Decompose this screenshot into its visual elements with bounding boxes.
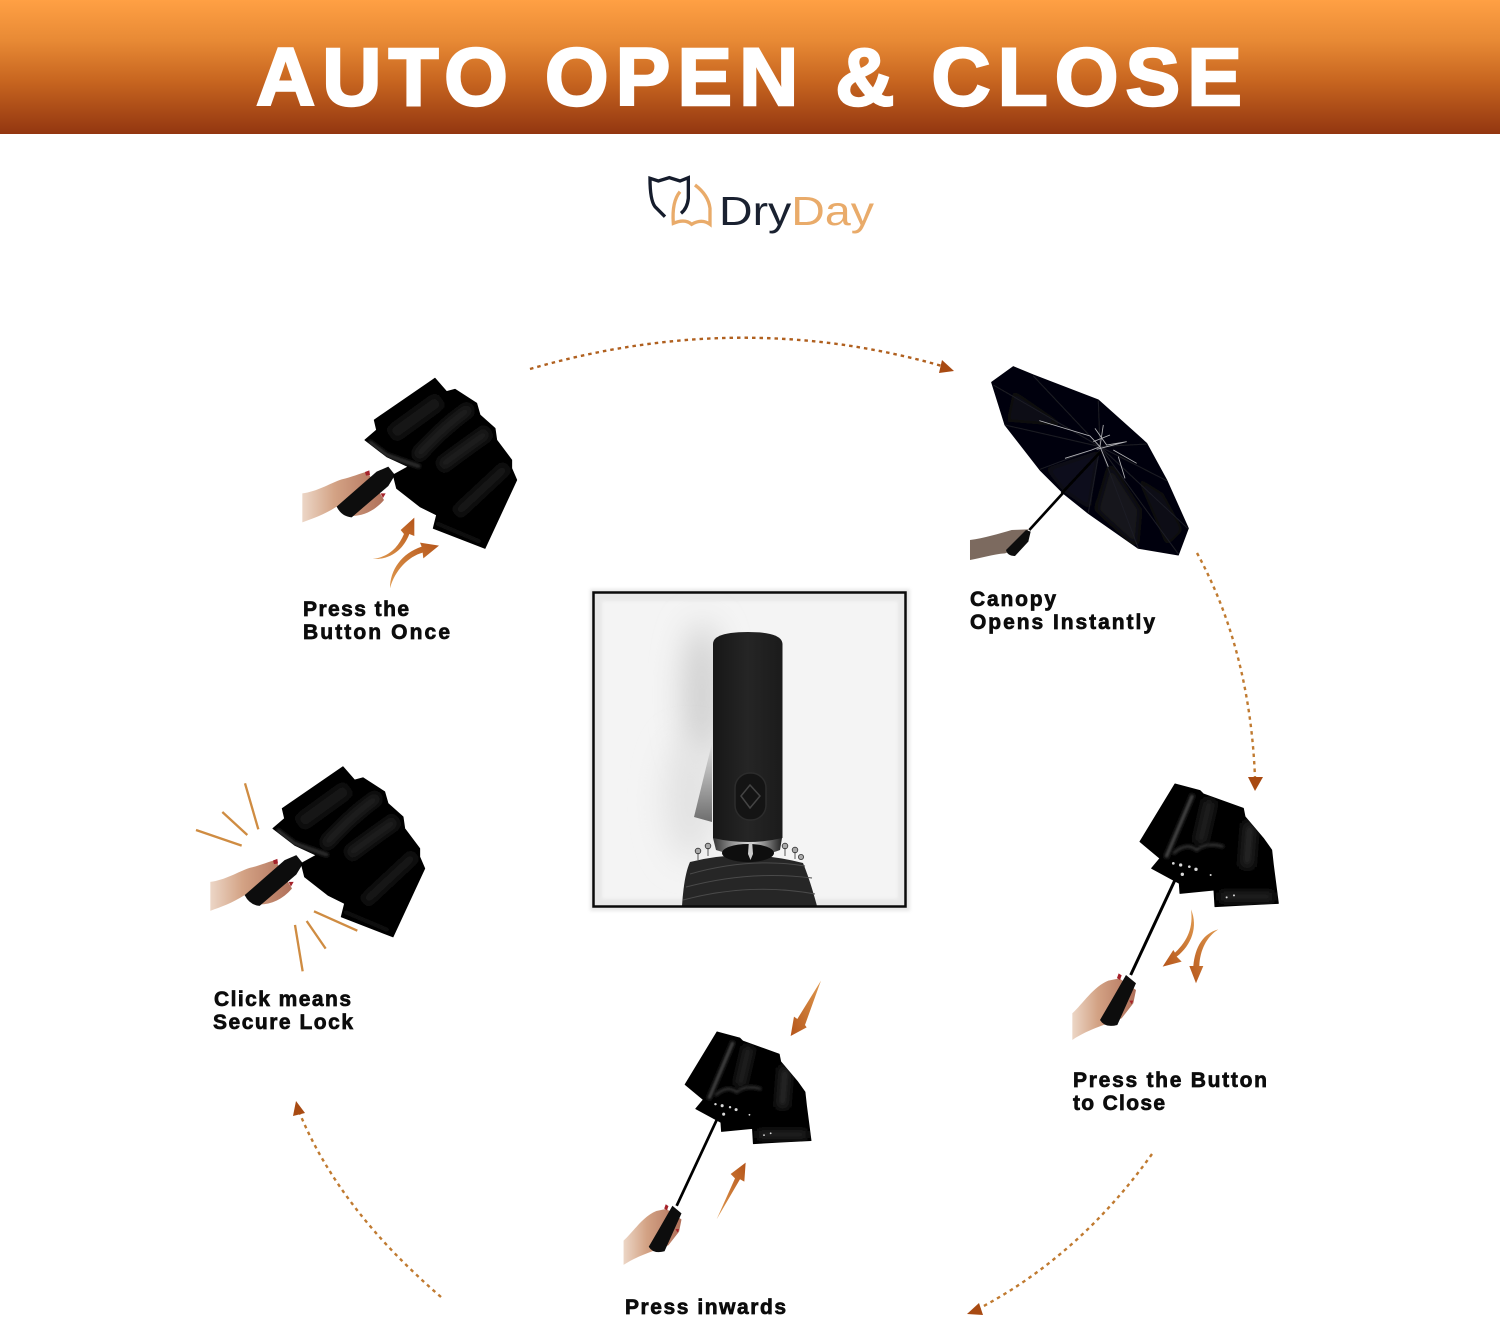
arrow: dotted arc step 1 to 2 xyxy=(530,338,954,373)
label: press inwards: Press inwards xyxy=(625,1296,786,1319)
arrow: dotted arc step 3 to 4 xyxy=(967,1154,1152,1315)
label: press the button to close: to Close xyxy=(1073,1092,1165,1115)
arrow: dotted arc step 2 to 3 xyxy=(1197,553,1263,791)
orange arrows: inwards xyxy=(717,981,821,1219)
title: AUTO OPEN & CLOSE xyxy=(256,32,1242,123)
tip pins xyxy=(695,843,804,860)
icon: shield and book xyxy=(650,178,710,224)
label: click means secure lock xyxy=(213,988,353,1034)
center photo: umbrella handle and button xyxy=(594,592,906,906)
strap xyxy=(694,743,712,822)
canopy xyxy=(682,855,817,906)
umbrella photo: open canopy with hand xyxy=(970,367,1188,560)
umbrella photo: half-closed canopy with hand, smaller xyxy=(624,1032,811,1265)
arrow: dotted arc step 4 to 1 xyxy=(293,1101,441,1297)
metal collar xyxy=(713,838,782,856)
label: canopy opens instantly: Opens Instantly xyxy=(970,611,1155,634)
label: click means secure lock: Secure Lock xyxy=(213,1011,353,1034)
umbrella photo: half-closed canopy with hand xyxy=(1072,784,1278,1040)
step 1: press the button once xyxy=(302,378,517,644)
umbrella photo: folded canopy with hand xyxy=(302,378,517,548)
click burst lines xyxy=(196,783,357,971)
step 3: press the button to close xyxy=(1072,784,1278,1115)
title banner xyxy=(0,0,1500,134)
label: press the button once xyxy=(303,598,450,644)
label: canopy opens instantly xyxy=(970,588,1155,634)
step 5: click means secure lock xyxy=(196,767,425,1034)
label: click means secure lock: Click means xyxy=(214,988,351,1011)
orange arrows: press xyxy=(373,518,439,588)
logo: DryDay xyxy=(650,178,875,234)
label: press the button to close xyxy=(1073,1069,1267,1115)
umbrella photo: folded canopy with hand xyxy=(210,767,425,937)
label: press the button once: Button Once xyxy=(303,621,450,644)
label: press the button to close: Press the Button xyxy=(1073,1069,1267,1092)
label: press the button once: Press the xyxy=(303,598,409,621)
logo wordmark: DryDay xyxy=(719,188,875,234)
handle cylinder xyxy=(713,632,782,842)
button xyxy=(735,773,766,820)
step 2: canopy opens instantly xyxy=(970,367,1188,634)
step 4: press inwards xyxy=(624,981,821,1319)
orange arrows: close xyxy=(1163,909,1218,983)
label: canopy opens instantly: Canopy xyxy=(970,588,1056,611)
